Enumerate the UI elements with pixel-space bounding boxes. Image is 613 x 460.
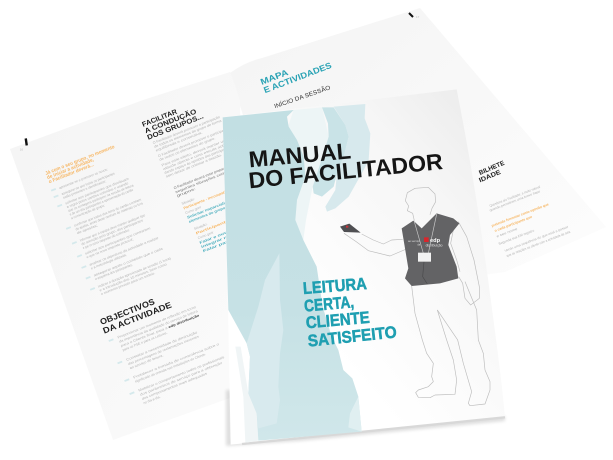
right page body text: quando permitirem uma breve frase [489,189,541,212]
lightest lower patch [348,397,362,432]
cover slogan: LEITURA [302,274,367,298]
manual cover [223,89,505,445]
objectives list [117,302,230,405]
facilitator examples: Como gerir [185,205,203,215]
facilitator task list: que os contagens participem na sessão de leitura [68,183,134,213]
facilitator task list: indicar a duração aproximada de sessão (1 hora) [97,256,171,289]
objectives list: Constatar a necessidade de diminuição [126,330,198,362]
facilitation paragraphs: atitude aberta e uma escuta activa, [162,141,231,171]
vest logo: edp [430,238,441,244]
facilitator task list: apresentar-se e promover os novos; [59,167,108,190]
facilitation paragraphs: sem deixar de orientar a sessão. [165,153,223,179]
blue silhouette artwork [223,104,370,443]
facilitator task list: informar que a equipa deve manter qualquer tipo [79,213,146,243]
facilitation paragraphs [152,115,235,179]
facilitator task list: solicitar aos participantes que distribuam [65,177,129,205]
facilitator examples: Como gerir [197,230,215,240]
right page body text: Segunda sua EM registro [498,229,535,246]
left page of open booklet [10,67,309,440]
facilitator examples: Solicitar imparcialidade aos [187,194,244,220]
objectives list: Proporcionar um momento de reflexão em torno [117,305,197,340]
right page heading: mapa e actividades: MAPA [259,67,289,87]
facilitator task list: estão presentes e identificados; [62,179,107,200]
orange intro heading: o Facilitador deverá... [48,162,95,185]
right page black mark and number: 17 [416,15,420,19]
facilitation paragraphs: O Facilitador deverá promover a participação [152,115,221,145]
facilitator examples: Participante ausente [195,210,253,236]
objectives list: Fortalecer a tomada de consciência sobre o [133,342,220,380]
facilitator task list: de ajudas, antes deste nenhum de materiais ou fora [75,201,143,231]
objectives list: para o Cliente final, para a edp distribuição [120,313,200,348]
cover slogan [302,274,398,351]
left page text block in page coordinates [15,67,309,413]
heading: objectivos da actividade: DA ACTIVIDADE [101,299,173,336]
vest logo [408,237,443,247]
objectives list: para os PSE e para os Leitores. [122,331,168,352]
vest logo: ao serviço [408,239,421,243]
cover slogan: CLIENTE [305,308,370,332]
facilitator task list [59,158,174,296]
facilitator examples: seguintes situações com os [175,168,232,194]
facilitator examples: elementos do grupo. [188,205,227,224]
right page body text: pretende fomentar como opinião que [491,202,549,228]
mid blue band [313,107,349,197]
objectives list: dos parâmetros de serviço para a obtenção [139,361,223,397]
facilitation paragraphs: Para este efeito, deverá manter uma [161,137,229,167]
facilitation paragraphs: de todos os elementos do grupo de forma [154,119,222,149]
right page body text: Questione a/o Facilitador, a muito natural [489,185,541,208]
cover bottom edge [242,417,505,444]
bullet markers [49,188,136,395]
right page of open booklet [230,8,606,300]
heading: facilitar a conducao dos grupos: DOS GRUPOS... [146,113,205,142]
facilitation paragraphs: dando espaço às opiniões dos participantes, [164,145,232,175]
facilitator examples: Falar para grupo [202,231,252,253]
facilitator examples [173,163,260,255]
facilitator examples: grupos: [176,187,196,198]
objectives list: no dia-a-dia. [143,395,161,405]
vest logo: da [417,242,421,246]
facilitator task list: solicitar aos participantes que contrariem [84,226,151,256]
cover slogan: SATISFEITO [307,322,398,351]
facilitation paragraphs: O Facilitador deverá promover e participar [157,128,227,158]
objectives list: Mobilizar o comportamento todos os profissionais [138,355,225,393]
right page body text: que as relações na cliente com a actividade de sala [506,230,571,258]
facilitator task list: confirmar que todos dos itens do cartão constam [73,198,142,228]
left strip tint [235,347,258,443]
facilitator task list: e a introdução dos 15 minutos, bem como [99,262,167,292]
vest logo: distribuição [426,243,443,247]
facilitator task list: e de um dos participantes a apresentação do cartão [69,188,134,217]
facilitation paragraphs: de todos os elementos do grupo. [159,136,216,162]
right page black mark and number [409,13,420,19]
orange intro heading: de iniciar a actividade, [46,157,95,181]
right page heading: bilhete: IDADE [478,169,503,184]
heading: objectivos da actividade: OBJECTIVOS [98,296,156,327]
facilitator examples: Falar e ouvir grupo [199,222,248,245]
right page body text [489,185,571,258]
facilitator task list: assegurar aquilo o conteúdo que o cada [93,247,163,277]
facilitator examples: O Facilitador deverá estar preparado [173,165,230,190]
facilitator examples: Participante - Incompatibilidade [183,185,240,210]
facilitator task list: analisar os objectivos da actividade a realizar [89,236,160,267]
orange intro heading: Já com o seu grupo, no momento [45,144,116,177]
right page body text: o cada participante que [494,215,533,233]
black mark and page number [20,138,27,151]
facilitator task list: e a metodologia utilizada; [90,253,127,271]
palest right shape [325,104,370,212]
pale band in silhouette [247,253,283,428]
right page heading: mapa e actividades: E ACTIVIDADES [262,60,333,95]
right page subheading: inicio da sessao: INÍCIO DA SESSÃO [273,84,332,110]
objectives list: das percentagens de reclamações inerentes [127,334,200,366]
heading: facilitar a conducao dos grupos: FACILITAR [141,109,178,129]
facilitation paragraphs: equilibrada e construtiva. [155,130,203,153]
right page body text: Verdo uma sequência do que está a passar [504,225,570,253]
objectives list: dos comportamentos mais adequados [141,371,208,401]
lanyard and badge [414,214,437,284]
right page heading: bilhete [478,160,506,184]
cover shadow [226,390,505,446]
facilitator task list: de apostas; [76,223,98,235]
cover title: DO FACILITADOR [247,148,444,193]
facilitator task list: o momento previsto para um sorteio. [100,271,156,296]
facilitator task list: assegurar-se que todos os participantes [61,171,116,196]
heading: objectivos da actividade [98,291,173,336]
right page body text: e seu nome [496,227,518,238]
heading: facilitar a conducao dos grupos [141,100,205,142]
cover title: MANUAL [248,137,352,172]
grey vest [402,213,459,286]
right page heading: bilhete: BILHETE [478,160,506,177]
facilitator task list: e esquema dos participantes; [94,263,133,281]
facilitator task list: a regra pelos cartões coloridos e usando [66,181,129,209]
cover slogan: CERTA, [303,292,355,316]
facilitator examples: Situação: [181,197,196,206]
facilitator task list: de atenção pelo grupo, dos participantes [81,218,144,246]
figure outline [344,187,490,406]
black mark and page number: 16 [20,147,23,151]
facilitator task list: a comunicação de grupo; [70,203,105,220]
handheld reading device [340,224,361,233]
facilitator task list: e que os outros integrantes são confirmados; [82,228,130,250]
facilitator examples: Situação: [193,222,208,231]
heading: facilitar a conducao dos grupos: A CONDUÇÃO [143,106,198,135]
pale blob behind title [270,107,329,307]
objectives list: significado da entrada nas instalações do Cliente. [134,352,207,384]
meter reader figure [340,187,490,406]
objectives list: da importância da qualidade do serviço de leitura [119,309,198,344]
cover sheet [223,89,505,445]
facilitator task list: e que na nova resposta protocol; [86,237,134,259]
main blue silhouette [223,110,362,441]
objectives list: ao serviço de leitura. [129,353,164,370]
facilitator examples: Integrar no grupo [201,227,250,249]
